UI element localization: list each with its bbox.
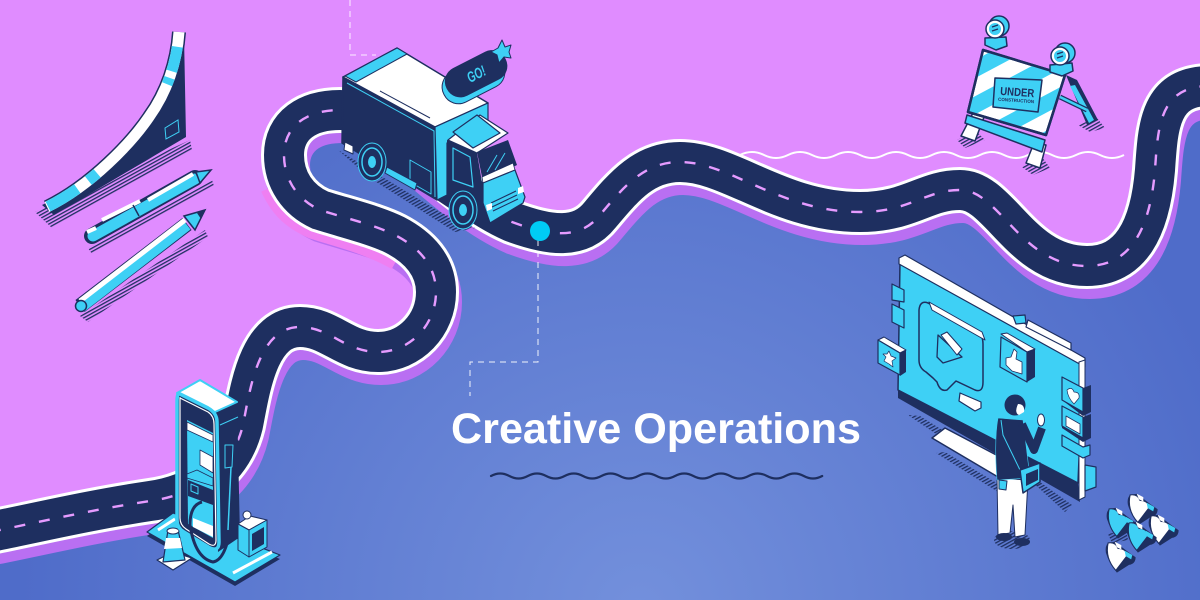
icon: billboard screen	[878, 255, 1096, 512]
top tabs	[1013, 315, 1071, 350]
heart cyan one	[1107, 508, 1137, 539]
heart white two	[1128, 494, 1158, 525]
heart white five	[1106, 542, 1136, 573]
windshield	[477, 140, 517, 182]
sign plate	[993, 78, 1042, 112]
dashed guide line top	[350, 0, 376, 55]
head	[1004, 394, 1026, 416]
pump white panel	[193, 518, 213, 537]
pump front frame	[177, 394, 219, 549]
screen dark underside	[898, 390, 1080, 502]
mail box	[1062, 406, 1091, 442]
lower beam	[965, 115, 1045, 152]
rear legs	[1066, 75, 1098, 125]
screen stand	[932, 428, 1002, 477]
icon: delivery truck	[338, 40, 525, 232]
heart cyan four	[1127, 522, 1157, 553]
GO sign: GO!	[464, 63, 489, 87]
screen shadows	[908, 415, 955, 440]
heart shadows	[1108, 530, 1128, 543]
pen highlights	[87, 174, 193, 232]
pump machine	[187, 420, 213, 538]
strap	[1001, 420, 1020, 470]
coat	[996, 418, 1030, 480]
icon: pen	[87, 170, 214, 254]
pencil tip	[184, 210, 205, 230]
icon: under construction barrier: CONSTRUCTION	[998, 97, 1035, 104]
road: white edge	[0, 86, 1200, 532]
left lamp	[985, 16, 1009, 50]
white wavy line on horizon	[740, 152, 1124, 158]
traffic cone	[157, 528, 192, 570]
fuel hose	[190, 467, 231, 562]
legs	[997, 478, 1028, 537]
road: purple shadow	[0, 96, 1200, 542]
screen face	[898, 262, 1083, 483]
icon: pencil	[76, 210, 208, 322]
pen shadow	[88, 180, 214, 254]
speech bubble	[919, 302, 983, 391]
road	[0, 86, 1200, 542]
front wheel	[449, 191, 477, 229]
icon: fuel pump	[147, 380, 280, 586]
icon: hearts	[1106, 494, 1179, 573]
person shadow	[994, 531, 1030, 549]
fuel can	[238, 511, 267, 557]
icon: under construction barrier	[957, 16, 1105, 175]
striped board	[968, 50, 1065, 135]
outer right tab	[1085, 465, 1096, 491]
rear wheel	[358, 143, 386, 181]
pencil end	[76, 300, 86, 312]
sign star	[491, 40, 511, 63]
pump side	[215, 402, 240, 552]
screen top edge	[899, 255, 1085, 367]
sign text: UNDER	[1000, 86, 1035, 100]
small right tab	[1062, 435, 1090, 458]
title: Creative Operations	[451, 405, 861, 453]
barrier front legs	[961, 113, 984, 141]
shoes	[996, 533, 1012, 541]
left tabs	[892, 284, 904, 328]
icon: person	[994, 394, 1044, 549]
pump base	[147, 517, 280, 586]
pen barrel	[92, 178, 195, 236]
bubble top bevel	[929, 302, 985, 340]
road: asphalt	[0, 86, 1200, 532]
bubble play icon	[937, 335, 962, 363]
ruler white edge	[47, 32, 179, 207]
hose handle	[225, 445, 233, 468]
thumbs up box	[1000, 333, 1035, 382]
icon: ruler	[35, 32, 192, 228]
pencil shadow	[80, 230, 208, 322]
GO sign	[435, 45, 515, 109]
hand	[1038, 414, 1044, 426]
heart white three	[1149, 515, 1179, 546]
truck shadow	[338, 150, 475, 232]
truck roof	[343, 48, 488, 127]
ruler small square	[165, 120, 179, 139]
heart box	[1062, 377, 1091, 416]
road: magenta glow on the loop	[282, 182, 403, 249]
lower tab	[959, 393, 981, 411]
title wavy underline	[491, 474, 822, 478]
ruler cyan bands	[47, 32, 179, 207]
raised arm	[1022, 424, 1042, 450]
truck box front	[435, 103, 488, 200]
cab front	[483, 170, 525, 223]
barrier shadows	[957, 130, 985, 148]
location pin dot	[530, 221, 550, 241]
dashed guide line from pin to title	[470, 240, 538, 396]
right lamp	[1050, 43, 1075, 76]
star box	[878, 337, 906, 376]
truck box side	[342, 77, 437, 200]
road: centre dashes	[0, 86, 1200, 532]
bag	[1020, 463, 1040, 493]
pencil body	[80, 224, 187, 306]
pump dark panel	[188, 480, 213, 505]
screen right edge	[1079, 360, 1085, 500]
pen tip	[196, 170, 211, 183]
pump top	[177, 380, 237, 412]
ruler body	[42, 33, 186, 215]
cab roof	[448, 115, 508, 153]
cab side	[437, 140, 490, 224]
pump keypad	[187, 470, 213, 486]
ruler shadow	[35, 140, 192, 228]
truck step	[385, 167, 417, 190]
pocket item	[999, 480, 1007, 490]
